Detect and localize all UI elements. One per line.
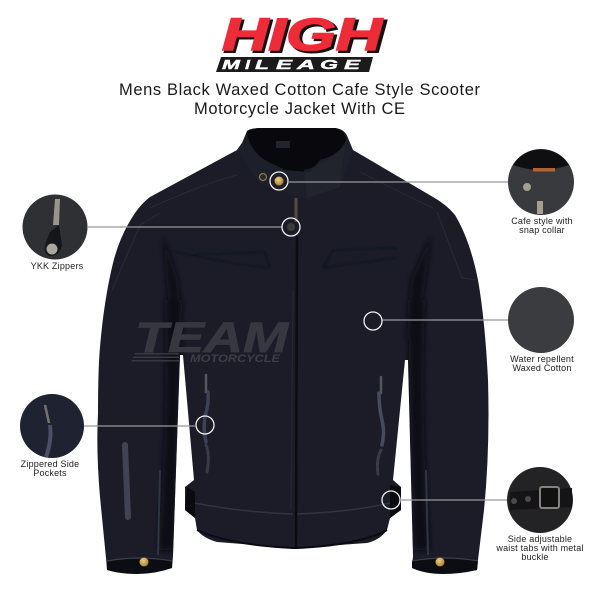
logo wordmark: HIGH [222,9,387,62]
title: Mens Black Waxed Cotton Cafe Style Scooter [119,81,480,99]
cuffs [107,558,478,574]
watermark: Team Motorcycle: TEAM [135,314,289,362]
title: Motorcycle Jacket With CE [194,100,405,118]
detail circle: collar [508,149,574,215]
left sleeve zipper vent [125,445,128,517]
detail circle: waxed cotton [508,287,574,353]
callout: waxed cotton [364,287,574,373]
logo banner: MILEAGE: E [276,57,293,72]
logo wordmark: HIGH: HIGH [224,11,387,62]
label: waist tabs with metal buckle: buckle [521,552,549,562]
watermark: Team Motorcycle: MOTORCYCLE [190,353,281,365]
label: zippered side pockets: Pockets [33,468,67,478]
label: YKK Zippers: YKK Zippers [31,261,84,271]
logo: High Mileage [216,9,387,72]
callout: snap collar [270,149,574,235]
left cuff snap [140,558,148,566]
shoulder seams [112,172,478,290]
label: snap collar: snap collar [519,225,565,235]
label: waist tabs with metal buckle: Side adjustable [508,534,572,544]
brass collar snap [274,176,284,186]
label: zippered side pockets: Zippered Side [21,459,79,469]
left side pocket zipper [204,375,208,472]
chest pocket seams [167,248,397,268]
logo banner: MILEAGE: E [344,57,361,72]
collar label tag [276,141,290,148]
label: snap collar: Cafe style with [511,216,573,226]
callout: waist tabs [382,467,584,562]
logo banner: MILEAGE: G [320,57,338,72]
title [119,81,480,118]
logo wordmark: HIGH: HIGH [222,9,384,60]
logo banner: MILEAGE: M [222,57,242,72]
logo banner: MILEAGE: I [245,57,251,72]
centre zipper [287,198,297,548]
pointer ring and line: waist tab [382,491,508,509]
label: zippered side pockets [21,459,79,478]
logo banner: MILEAGE: A [295,57,315,72]
collar [237,128,352,198]
label: waxed cotton: Water repellent [510,354,574,364]
pointer ring and line: zipper [88,218,300,236]
right side pocket zipper [377,377,384,474]
pointer ring and line: collar [270,172,508,190]
label: waxed cotton [510,354,574,373]
sleeve cuff zip lines [158,470,428,555]
label: waist tabs with metal buckle: waist tabs with metal [495,543,584,553]
label: waxed cotton: Waxed Cotton [512,363,572,373]
detail circle: buckle [507,467,573,533]
detail circle: pocket zipper [20,394,84,458]
pointer ring and line: cotton [364,312,508,330]
callout: YKK zippers [22,194,300,271]
collar eyelet [260,174,266,180]
logo banner: MILEAGE [216,57,373,72]
waistband [185,485,401,548]
pointer ring and line: pocket [84,416,214,434]
detail circle: zipper [22,194,88,260]
label: snap collar [511,216,573,235]
sleeve inner shadows [158,235,431,550]
jacket silhouette [97,128,488,573]
logo banner: MILEAGE: L [255,57,269,72]
right cuff snap [436,558,444,566]
jacket [97,128,488,574]
label: waist tabs with metal buckle [495,534,584,562]
callout: zippered side pockets [20,394,214,478]
